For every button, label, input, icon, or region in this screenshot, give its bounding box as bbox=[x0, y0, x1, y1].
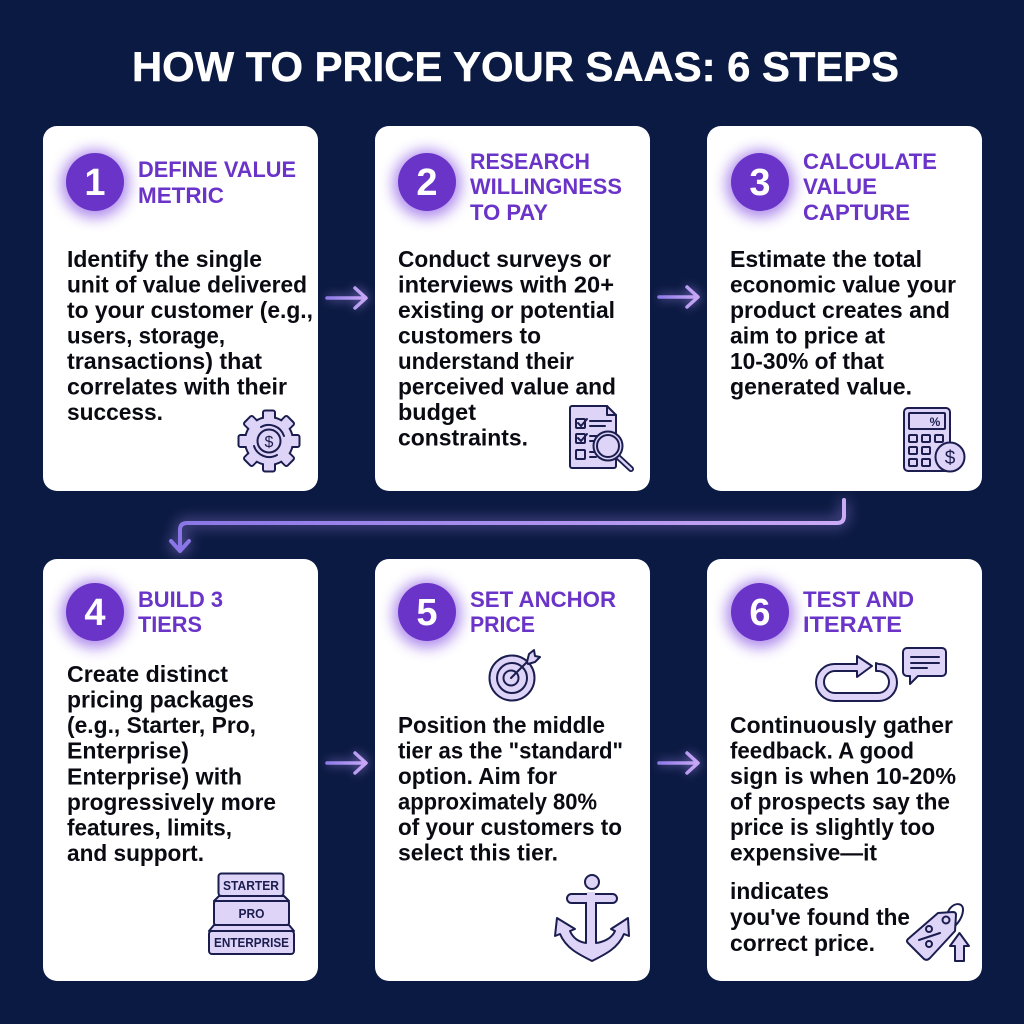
arrow: step 2 to step 3 bbox=[659, 287, 698, 307]
step 6 body text: correct price. bbox=[730, 930, 875, 956]
panel: step 5 set anchor price bbox=[375, 559, 650, 981]
step 1 number badge bbox=[61, 150, 129, 218]
arrow: step 5 to step 6 bbox=[659, 753, 698, 773]
step 2 heading: RESEARCH bbox=[470, 149, 590, 174]
icon: calculator with dollar: $ bbox=[945, 448, 956, 469]
step 2 body text: interviews with 20+ bbox=[398, 272, 614, 298]
icon: checklist with magnifier bbox=[570, 406, 631, 469]
connector arrow: step 3 down to step 4 bbox=[171, 500, 844, 551]
step 5 heading: PRICE bbox=[470, 612, 535, 637]
step 2 heading bbox=[470, 149, 622, 225]
step 1 body text bbox=[67, 246, 313, 425]
arrow: step 1 to step 2 bbox=[327, 288, 366, 308]
step 2 body text: budget bbox=[398, 399, 476, 425]
icon: gear with dollar bbox=[238, 410, 300, 472]
step 1 number badge: 1 bbox=[84, 162, 106, 204]
step 3 heading bbox=[803, 149, 937, 225]
step 2 body text: existing or potential bbox=[398, 297, 615, 323]
step 5 heading bbox=[470, 587, 616, 637]
step 4 heading: TIERS bbox=[138, 612, 202, 637]
step 1 body text: to your customer (e.g., bbox=[67, 297, 313, 323]
step 6 number badge: 6 bbox=[749, 592, 771, 634]
step 1 body text: Identify the single bbox=[67, 246, 262, 272]
step 2 body text bbox=[398, 246, 616, 450]
step 2 heading: TO PAY bbox=[470, 200, 548, 225]
icon: pricing tier stack: ENTERPRISE bbox=[214, 936, 289, 950]
step 3 body text: aim to price at bbox=[730, 322, 885, 348]
icon: gear with dollar: $ bbox=[265, 434, 274, 451]
step 4 body text: Enterprise) bbox=[67, 738, 189, 764]
step 3 heading: CALCULATE bbox=[803, 149, 937, 174]
step 6 heading: TEST AND bbox=[803, 587, 914, 612]
step 2 body text: Conduct surveys or bbox=[398, 246, 611, 272]
step 2 number badge: 2 bbox=[416, 162, 438, 204]
icon: pricing tier stack: STARTER bbox=[223, 879, 279, 893]
step 3 heading: CAPTURE bbox=[803, 200, 910, 225]
icon: pricing tier stack bbox=[209, 874, 294, 954]
icon: calculator with dollar: % bbox=[930, 415, 941, 429]
step 5 number badge: 5 bbox=[416, 592, 438, 634]
step 1 body text: unit of value delivered bbox=[67, 272, 307, 298]
step 5 body text bbox=[398, 712, 623, 866]
icon: calculator with dollar bbox=[904, 408, 964, 472]
arrow: step 4 to step 5 bbox=[327, 753, 366, 773]
icon: price tag with up arrow bbox=[907, 904, 969, 961]
step 6 body text: indicates bbox=[730, 878, 829, 904]
step 4 body text: Create distinct bbox=[67, 661, 228, 687]
step 4 body text: progressively more bbox=[67, 789, 276, 815]
step 2 heading: WILLINGNESS bbox=[470, 174, 622, 199]
step 5 number badge bbox=[393, 580, 461, 648]
step 5 body text: Position the middle bbox=[398, 712, 605, 738]
step 4 number badge bbox=[61, 580, 129, 648]
step 1 heading bbox=[138, 157, 296, 208]
step 4 number badge: 4 bbox=[84, 592, 106, 634]
step 3 body text: Estimate the total bbox=[730, 246, 922, 272]
step 3 body text: generated value. bbox=[730, 374, 912, 400]
step 3 body text: economic value your bbox=[730, 272, 956, 298]
step 3 body text: 10-30% of that bbox=[730, 348, 884, 374]
step 3 number badge bbox=[726, 150, 794, 218]
step 1 body text: users, storage, bbox=[67, 322, 225, 348]
step 5 heading: SET ANCHOR bbox=[470, 587, 616, 612]
step 2 body text: customers to bbox=[398, 322, 541, 348]
step 2 body text: perceived value and bbox=[398, 374, 616, 400]
step 1 body text: correlates with their bbox=[67, 374, 287, 400]
panel: step 2 research willingness to pay bbox=[375, 126, 650, 491]
icon: target with dart bbox=[490, 650, 540, 700]
icon: pricing tier stack: PRO bbox=[238, 907, 265, 921]
step 6 body text: you've found the bbox=[730, 904, 910, 930]
step 6 body text bbox=[730, 712, 956, 956]
step 4 body text: and support. bbox=[67, 840, 204, 866]
panel: step 3 calculate value capture bbox=[707, 126, 982, 491]
step 6 body text: sign is when 10-20% bbox=[730, 763, 956, 789]
step 2 body text: constraints. bbox=[398, 424, 528, 450]
step 3 heading: VALUE bbox=[803, 174, 877, 199]
step 5 body text: approximately 80% bbox=[398, 788, 597, 814]
panel: step 1 define value metric bbox=[43, 126, 318, 491]
step 1 body text: success. bbox=[67, 399, 163, 425]
icon: anchor bbox=[555, 875, 629, 961]
step 6 body text: expensive—it bbox=[730, 840, 877, 866]
icon: iteration loop bbox=[816, 656, 897, 701]
step 5 body text: tier as the "standard" bbox=[398, 738, 623, 764]
step 6 heading: ITERATE bbox=[803, 612, 902, 637]
step 3 body text bbox=[730, 246, 956, 400]
step 6 number badge bbox=[726, 580, 794, 648]
step 3 body text: product creates and bbox=[730, 297, 950, 323]
step 4 body text: (e.g., Starter, Pro, bbox=[67, 712, 256, 738]
step 3 number badge: 3 bbox=[749, 162, 771, 204]
panel: step 4 build 3 tiers bbox=[43, 559, 318, 981]
step 6 body text: of prospects say the bbox=[730, 788, 950, 814]
panel: step 6 test and iterate bbox=[707, 559, 982, 981]
step 4 body text: pricing packages bbox=[67, 686, 254, 712]
step 6 body text: feedback. A good bbox=[730, 738, 914, 764]
step 6 body text: price is slightly too bbox=[730, 814, 935, 840]
step 4 body text: Enterprise) with bbox=[67, 764, 242, 790]
step 1 heading: DEFINE VALUE bbox=[138, 157, 296, 182]
icon: speech bubble bbox=[903, 648, 946, 684]
step 4 body text bbox=[67, 661, 276, 866]
step 1 heading: METRIC bbox=[138, 183, 224, 208]
step 5 body text: option. Aim for bbox=[398, 763, 557, 789]
step 2 body text: understand their bbox=[398, 348, 574, 374]
step 4 heading bbox=[138, 587, 223, 637]
step 4 heading: BUILD 3 bbox=[138, 587, 223, 612]
step 6 body text: Continuously gather bbox=[730, 712, 953, 738]
step 5 body text: of your customers to bbox=[398, 814, 622, 840]
step 4 body text: features, limits, bbox=[67, 814, 232, 840]
step 5 body text: select this tier. bbox=[398, 840, 558, 866]
title: HOW TO PRICE YOUR SAAS: 6 STEPS bbox=[132, 43, 899, 90]
step 6 heading bbox=[803, 587, 914, 637]
step 1 body text: transactions) that bbox=[67, 348, 262, 374]
step 2 number badge bbox=[393, 150, 461, 218]
